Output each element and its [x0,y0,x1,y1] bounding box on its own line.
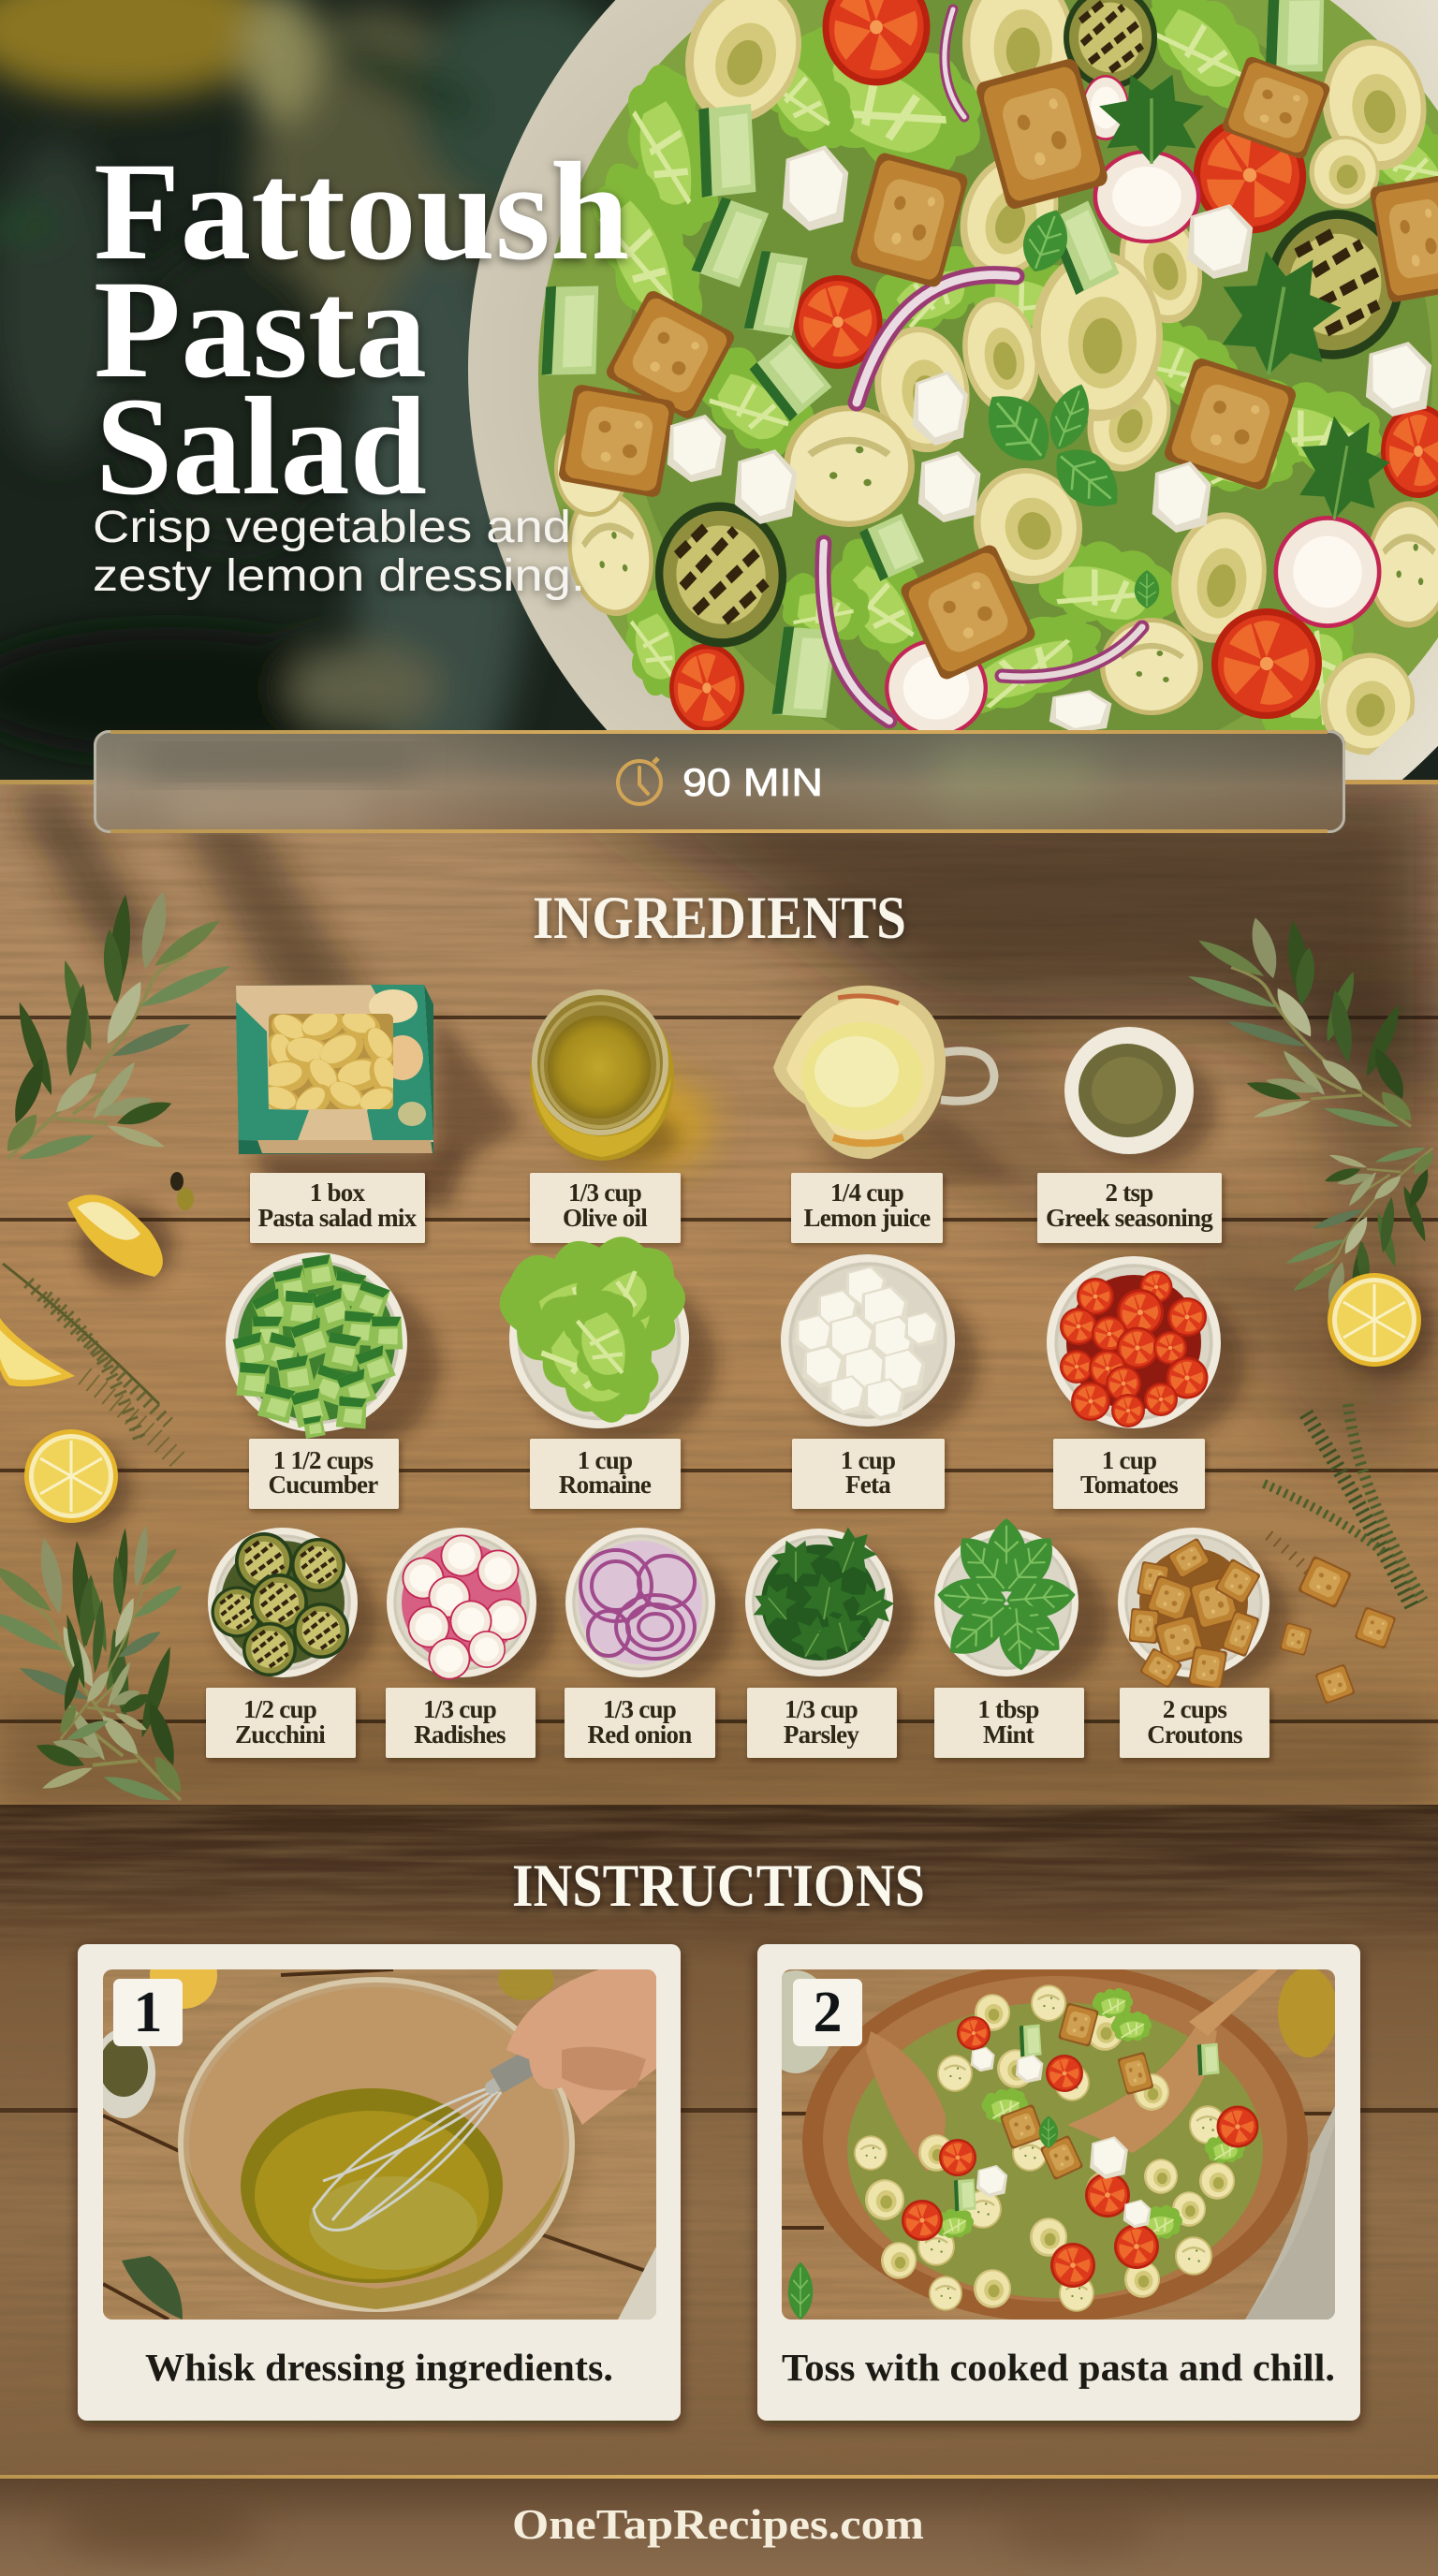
label: croutons [1120,1688,1269,1758]
pasta salad mix box [236,985,524,1208]
hero photo: salad bowl [0,0,1438,780]
label: radishes: Radishes [414,1720,506,1749]
step card 1 [78,1941,681,2421]
romaine bowl [500,1232,716,1446]
tomatoes bowl [1047,1256,1245,1444]
hero divider gold line [0,780,1438,784]
label: romaine: 1 cup [578,1446,632,1474]
label: radishes: 1/3 cup [423,1695,496,1723]
scattered croutons [1280,1555,1397,1705]
radishes bowl [387,1528,557,1690]
label: red onion: Red onion [587,1720,692,1749]
label: mint: Mint [983,1720,1034,1749]
label: lemon juice [791,1173,943,1243]
title: Pasta [94,252,427,407]
label: red onion [565,1688,715,1758]
label: cucumber: 1 1/2 cups [273,1446,374,1474]
label: tomatoes: 1 cup [1102,1446,1156,1474]
red onion bowl [565,1528,737,1690]
label: feta: Feta [845,1471,891,1499]
step card 2 [757,1944,1360,2421]
step 1 number badge: 1 [133,1981,163,2044]
label: parsley: 1/3 cup [785,1695,858,1723]
label: pasta salad mix [250,1173,425,1243]
decorative lemons and olives [0,1172,1434,1535]
step 1 photo: whisking dressing [92,1941,656,2320]
page background: wood table [0,782,1438,1807]
label: lemon juice: Lemon juice [804,1204,931,1232]
label: greek seasoning [1037,1173,1222,1243]
serving bowl [468,0,1438,780]
step 2 number badge: 2 [813,1981,843,2044]
title: Fattoush [94,134,629,289]
label: red onion: 1/3 cup [603,1695,676,1723]
label: croutons: Croutons [1147,1720,1242,1749]
decorative herb sprigs [3,1264,1423,1610]
mint bowl [934,1518,1109,1690]
label: lemon juice: 1/4 cup [830,1178,903,1207]
label: parsley [747,1688,897,1758]
olive oil jar [530,992,712,1170]
label: olive oil: 1/3 cup [568,1178,641,1207]
icon: clock [618,758,661,804]
title [94,134,629,524]
subtitle: zesty lemon dressing. [93,551,585,601]
label: radishes [386,1688,536,1758]
step 2 photo: tossed pasta salad [758,1963,1338,2322]
label: romaine [530,1439,681,1509]
label: olive oil [530,1173,681,1243]
label: greek seasoning: 2 tsp [1105,1178,1153,1207]
label: zucchini [206,1688,356,1758]
croutons bowl [1118,1528,1289,1690]
label: feta [792,1439,945,1509]
label: cucumber [249,1439,399,1509]
label: zucchini: 1/2 cup [243,1695,316,1723]
heading: instructions: INSTRUCTIONS [512,1852,925,1920]
step 2 number badge [793,1979,862,2046]
label: cucumber: Cucumber [268,1471,378,1499]
website: OneTapRecipes.com [512,2500,924,2548]
label: mint [934,1688,1084,1758]
label: zucchini: Zucchini [235,1720,326,1749]
parsley bowl [744,1522,915,1690]
subtitle: Crisp vegetables and [93,503,571,552]
label: tomatoes: Tomatoes [1080,1471,1178,1499]
cucumber bowl [226,1252,440,1456]
cook time: 90 MIN [682,760,823,804]
time pill [94,730,1345,833]
label: olive oil: Olive oil [563,1204,648,1232]
step 1 number badge [113,1979,183,2046]
greek seasoning bowl [1064,1027,1217,1165]
label: feta: 1 cup [841,1446,895,1474]
label: croutons: 2 cups [1163,1695,1226,1723]
feta bowl [781,1254,978,1442]
label: pasta salad mix: Pasta salad mix [258,1204,418,1232]
zucchini bowl [208,1528,377,1690]
salad ingredients [538,0,1438,754]
step 1 caption: Whisk dressing ingredients. [145,2346,613,2389]
subtitle [93,503,585,601]
lemon juice measuring cup [773,986,1020,1189]
instructions panel background [0,1805,1438,2479]
footer band [0,2475,1438,2576]
step 2 caption: Toss with cooked pasta and chill. [782,2346,1335,2389]
label: greek seasoning: Greek seasoning [1046,1204,1213,1232]
label: pasta salad mix: 1 box [310,1178,366,1207]
title: Salad [95,369,427,524]
label: romaine: Romaine [559,1471,652,1499]
label: tomatoes [1053,1439,1205,1509]
label: parsley: Parsley [784,1720,859,1749]
decorative olive branches [0,889,1438,1807]
label: mint: 1 tbsp [977,1695,1039,1723]
heading: ingredients: INGREDIENTS [533,885,906,952]
